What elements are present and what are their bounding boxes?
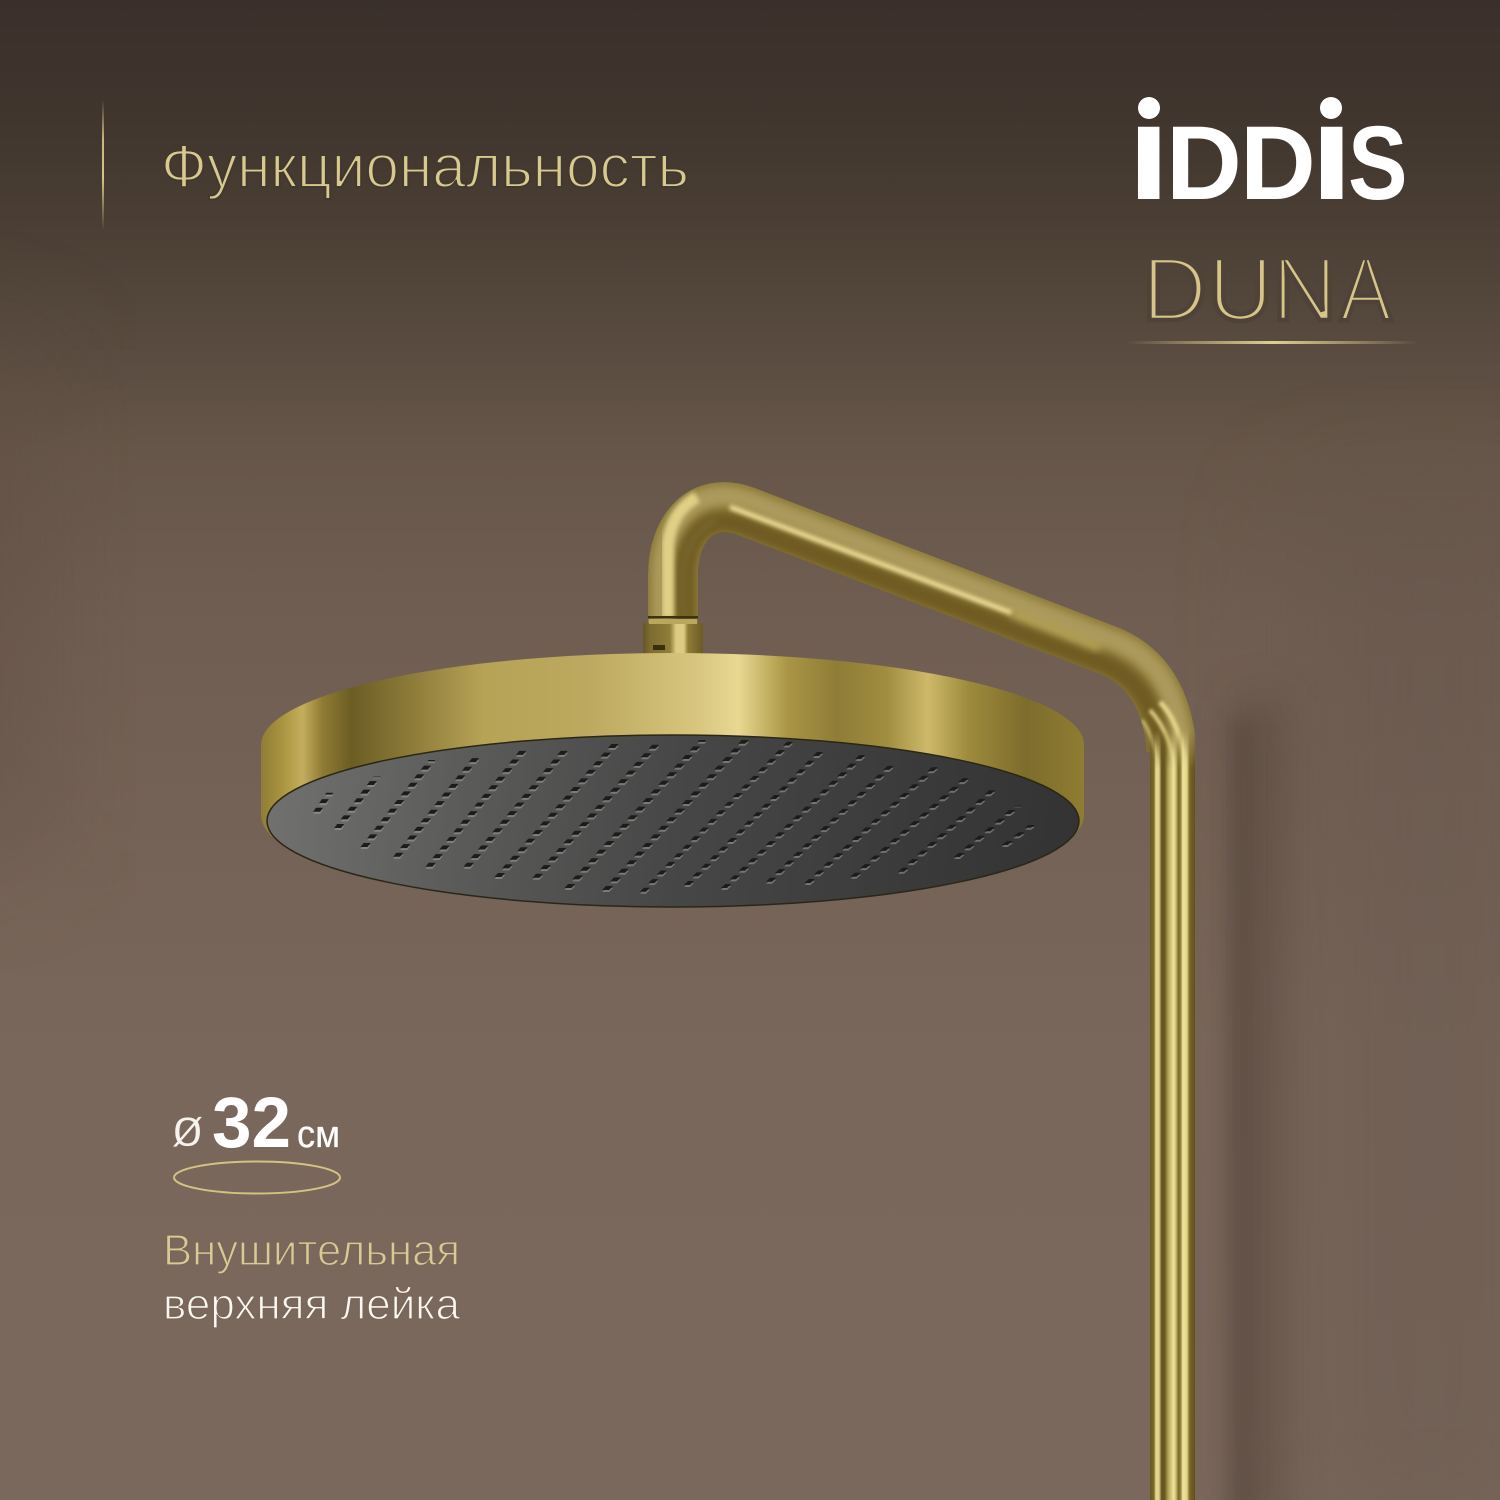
pipe: vertical column	[1150, 730, 1195, 1500]
logo: IDDIS: I	[1128, 105, 1169, 222]
spec: diameter value: ø	[171, 1098, 204, 1158]
caption	[163, 1226, 461, 1329]
series name: DUNA: DUN	[1142, 240, 1337, 340]
connector flange	[643, 616, 703, 654]
icon: diameter ellipse	[174, 1162, 340, 1194]
shower pipe arm	[662, 496, 1195, 1500]
logo: IDDIS: S	[1348, 104, 1408, 222]
caption: верхняя лейка	[163, 1280, 461, 1329]
spec: diameter value: 32	[212, 1084, 291, 1163]
caption: Внушительная	[163, 1226, 460, 1275]
spec: diameter value	[171, 1084, 340, 1163]
heading: Функциональность	[161, 133, 689, 200]
head: black spray face	[267, 735, 1079, 907]
logo: IDDIS: D	[1166, 105, 1242, 222]
shower head	[261, 653, 1084, 907]
accent line: under series name	[1127, 341, 1418, 344]
head: brass rim	[261, 653, 1084, 907]
accent line: vertical	[102, 100, 104, 230]
logo: IDDIS: I	[1311, 105, 1352, 222]
head: spray nozzles	[317, 740, 1032, 894]
logo: IDDIS: D	[1240, 105, 1316, 222]
series name: DUNA: A	[1340, 239, 1392, 339]
spec: diameter value: см	[297, 1114, 340, 1156]
logo: IDDIS	[1128, 97, 1408, 222]
